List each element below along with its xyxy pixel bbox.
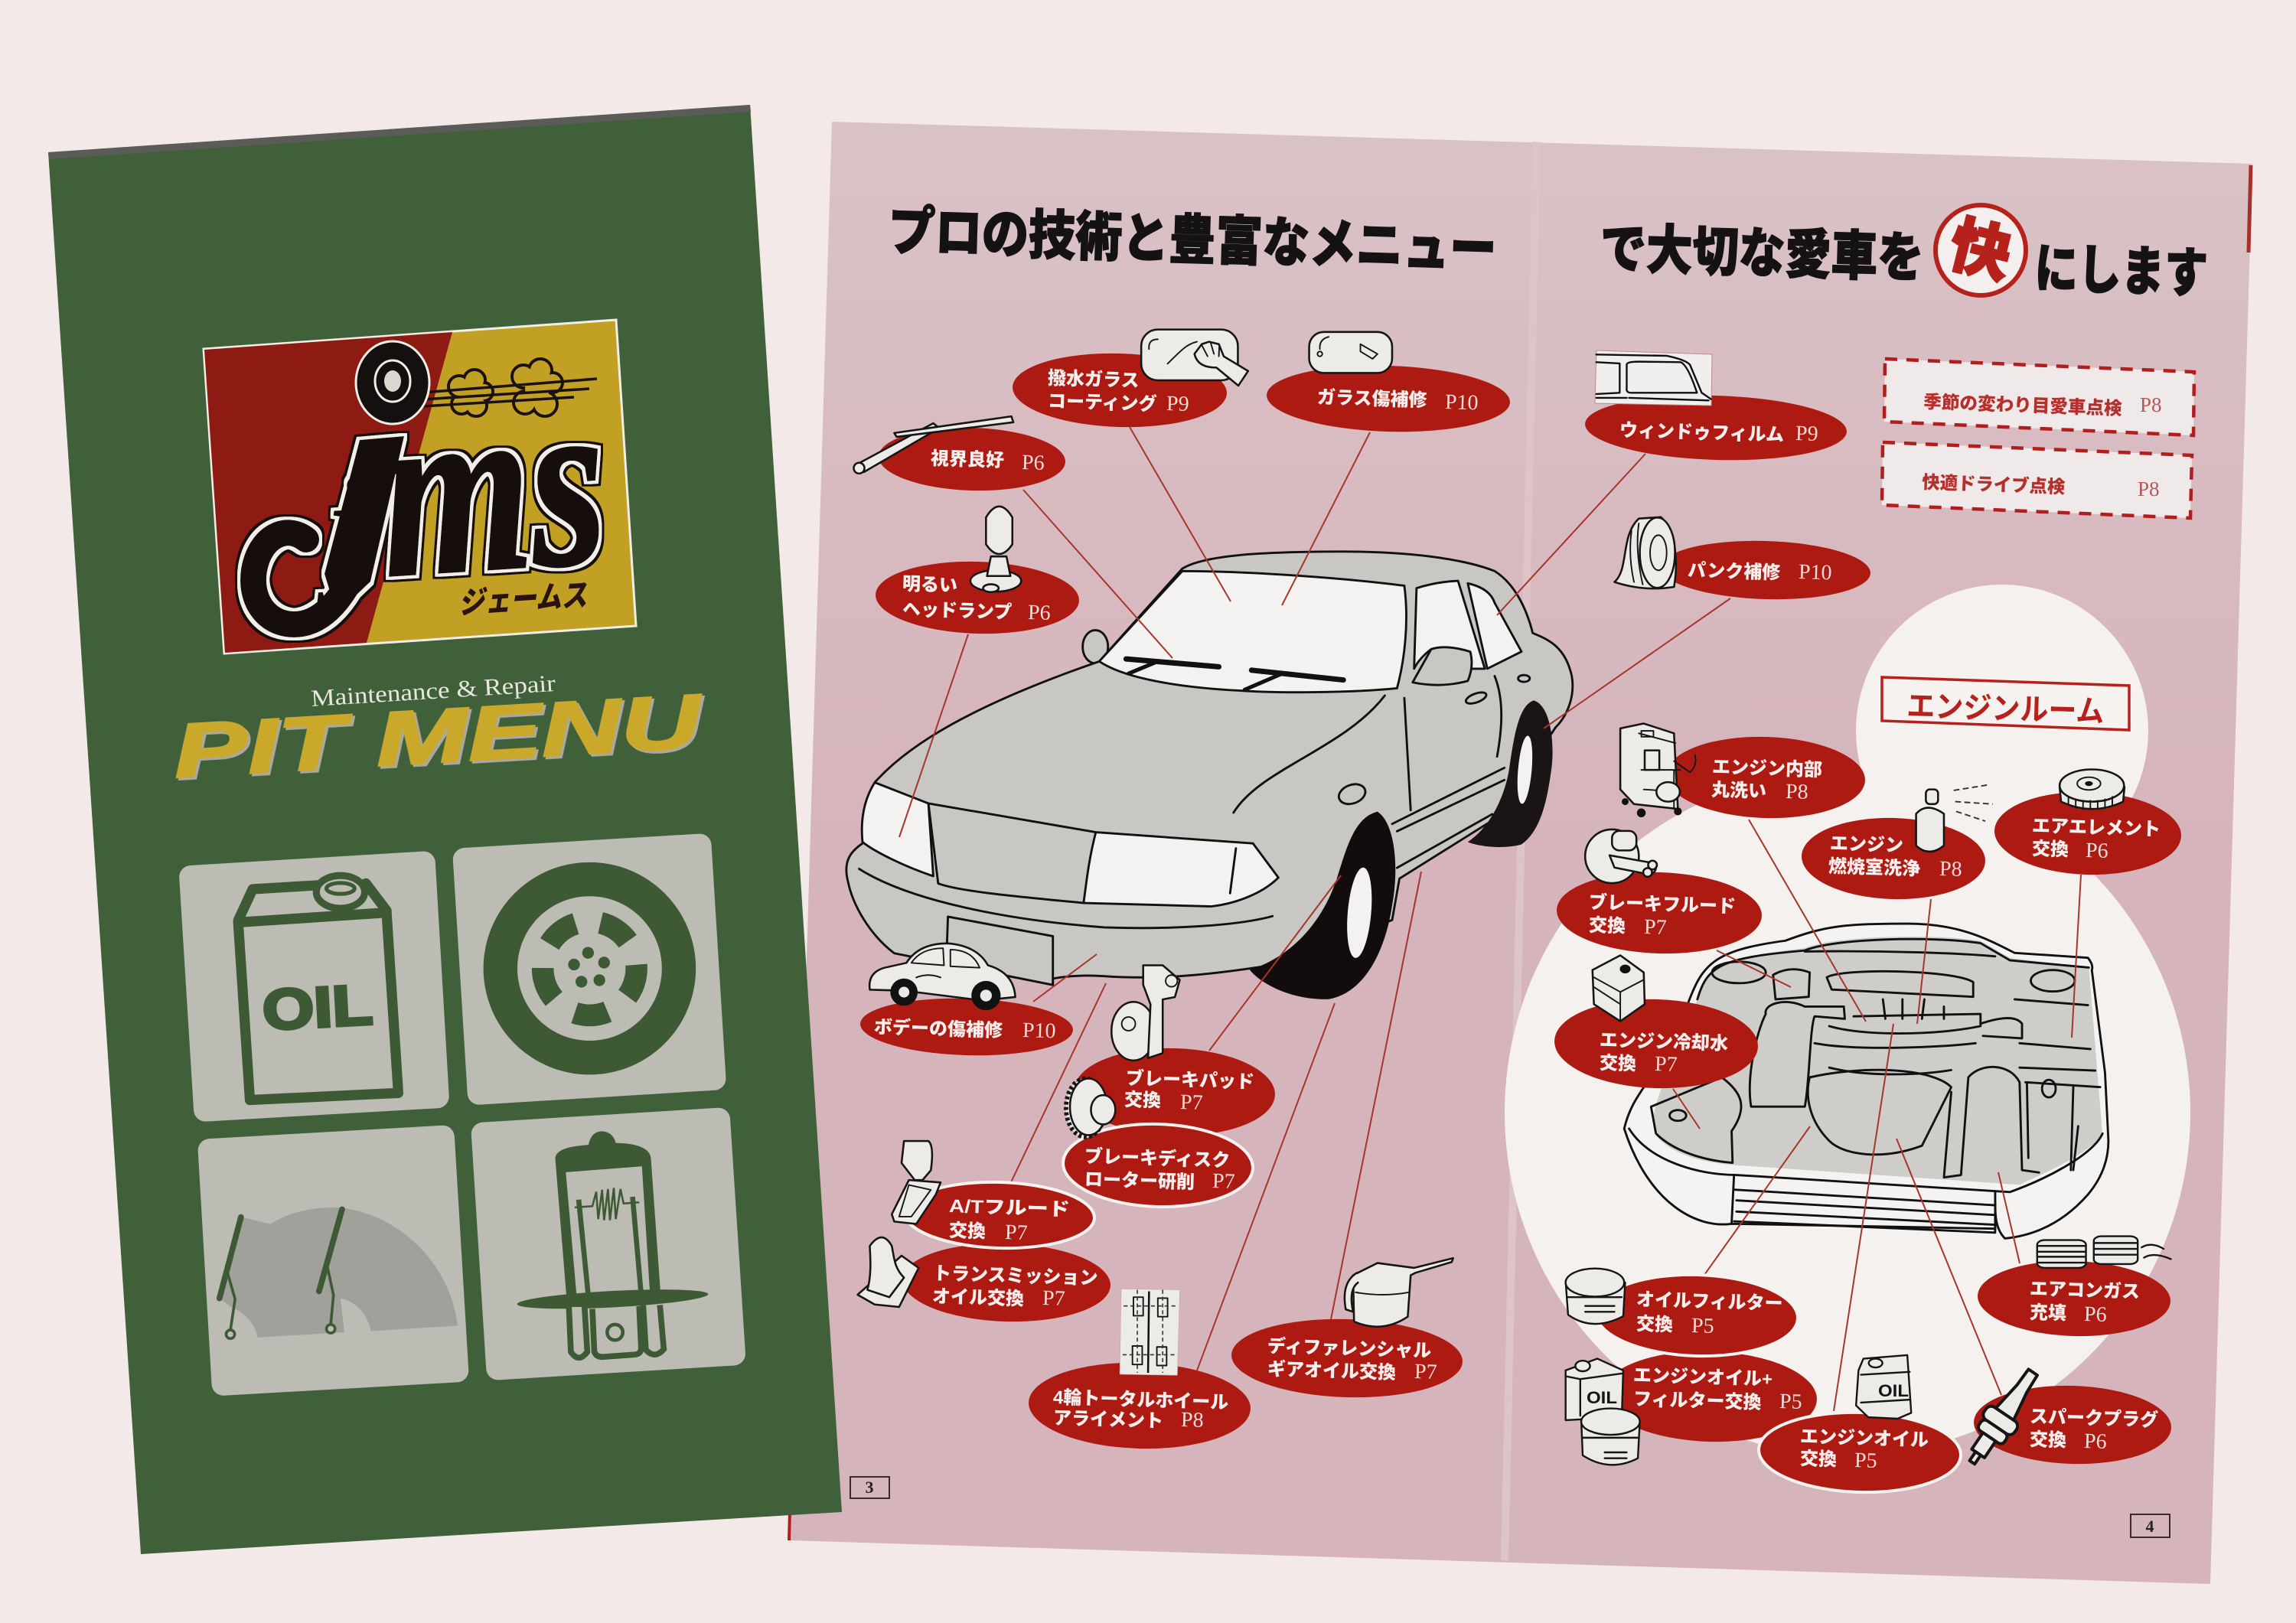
icon: brake assembly [1111, 965, 1180, 1061]
callout: engine oil: エンジンオイル [1800, 1426, 1929, 1451]
callout: wheel alignment [1027, 1360, 1252, 1452]
tile: tire [465, 846, 714, 1093]
callout: engine oil plus filter [1601, 1348, 1818, 1445]
icon: spray bottle [1916, 784, 1993, 852]
callout: wheel alignment: 4輪トータルホイール [1053, 1387, 1229, 1413]
icon: spark plug [1957, 1362, 2048, 1472]
callout: combustion chamber cleaning: 燃焼室洗浄 [1828, 856, 1920, 880]
callout: transmission oil: オイル交換 [932, 1286, 1024, 1310]
callout: window film: P9 [1795, 422, 1818, 446]
callout: seasonal check: P8 [2140, 393, 2162, 416]
callout: AT fluid: A/Tフルード [949, 1196, 1070, 1221]
logo [204, 320, 636, 653]
headlights and grille [862, 783, 1278, 907]
callout: spark plug: P6 [2084, 1429, 2107, 1454]
callout: differential gear oil: ディファレンシャル [1267, 1335, 1432, 1361]
logo speed lines [422, 379, 597, 406]
icon: alignment chart [1120, 1289, 1180, 1375]
heading: left half: プロの技術と豊富なメニュー [888, 201, 1498, 279]
logo wordmark jms: ms [373, 344, 613, 629]
tile: wiper [210, 1137, 458, 1383]
callout: differential gear oil [1231, 1316, 1463, 1400]
callout: oil filter [1594, 1272, 1799, 1359]
callout: seasonal check [1884, 359, 2194, 435]
icon: brake fluid master cylinder [1585, 829, 1657, 883]
icon: gear oil jug [1345, 1258, 1453, 1327]
engine room label [1882, 677, 2129, 730]
icon: coolant can [1593, 956, 1645, 1022]
callout: engine coolant [1553, 996, 1760, 1091]
callout: engine coolant: 交換 [1600, 1053, 1636, 1074]
callout: glass repair: P10 [1445, 390, 1479, 415]
callout: engine coolant: P7 [1655, 1052, 1678, 1077]
callout: puncture repair: パンク補修 [1688, 560, 1781, 584]
callout: spark plug: スパークプラグ [2030, 1406, 2158, 1431]
callout: window film [1584, 392, 1848, 464]
panel: brochure cover [48, 105, 842, 1554]
page number 3: 3 [865, 1478, 874, 1497]
icon: bulb [970, 507, 1021, 592]
callout: engine internal flush: エンジン内部 [1712, 757, 1822, 781]
page number 3 [850, 1477, 889, 1498]
logo wordmark jms [253, 344, 613, 629]
heading: right half [1600, 205, 2209, 304]
title: PIT MENU: PIT MENU [171, 678, 706, 794]
callout: puncture repair [1660, 538, 1871, 602]
callout: air element [1993, 789, 2183, 878]
windshield [1099, 571, 1406, 693]
icon: oil can [1856, 1355, 1911, 1419]
callout: engine coolant: エンジン冷却水 [1600, 1030, 1728, 1054]
callout: brake fluid: P7 [1644, 915, 1667, 940]
icons on upper left page [853, 330, 1392, 592]
callout: air con gas: エアコンガス [2030, 1279, 2140, 1302]
icon: glass chip [1309, 332, 1392, 373]
callout: brake fluid: 交換 [1589, 915, 1626, 937]
page number 4: 4 [2146, 1517, 2154, 1536]
callout: air element: 交換 [2032, 839, 2069, 860]
callout: spark plug: 交換 [2030, 1429, 2066, 1451]
panel: brochure inside spread [789, 122, 2252, 1584]
callout: oil filter: 交換 [1636, 1314, 1673, 1335]
text: oil can label small: OIL [1878, 1381, 1909, 1400]
callout: brake fluid: ブレーキフルード [1589, 891, 1736, 917]
callout: oil filter: P5 [1691, 1314, 1714, 1338]
callout: air con gas [1977, 1258, 2171, 1339]
callout: engine oil: 交換 [1800, 1449, 1837, 1470]
icon: wiper [853, 416, 1013, 474]
callout: body scratch repair: ボデーの傷補修 [874, 1016, 1003, 1041]
tile: bulb [483, 1119, 734, 1368]
callout: water repellent glass coating [1012, 350, 1228, 430]
callout: comfort drive check [1882, 442, 2192, 518]
icon: brake disc [1066, 1078, 1115, 1137]
callout: engine oil [1758, 1410, 1962, 1495]
callout: brake pads [1073, 1045, 1277, 1139]
icon: air con vents [2037, 1237, 2171, 1268]
callout: transmission oil [902, 1240, 1111, 1325]
callout: brake disc [1062, 1121, 1254, 1210]
callout: engine oil: P5 [1854, 1449, 1877, 1473]
callout: AT fluid: P7 [1005, 1221, 1028, 1245]
callout: differential gear oil: P7 [1414, 1360, 1437, 1384]
callout: water repellent glass coating: コーティング [1048, 390, 1157, 415]
tile: oil can [191, 863, 437, 1110]
icon: flushing machine [1620, 724, 1695, 817]
callout: air element: エアエレメント [2032, 816, 2161, 840]
callout: differential gear oil: ギアオイル交換 [1267, 1359, 1396, 1383]
heading: right half: で大切な愛車を [1600, 219, 1925, 288]
car illustration [846, 552, 1573, 999]
heading: right half: 快 [1942, 210, 2018, 291]
callout: air con gas: 充填 [2030, 1302, 2066, 1324]
callout: engine oil plus filter: P5 [1779, 1390, 1802, 1414]
callout: combustion chamber cleaning: エンジン [1830, 833, 1903, 856]
wheels [1250, 812, 1395, 999]
callout: spark plug [1973, 1383, 2172, 1467]
callout: seasonal check: 季節の変わり目愛車点検 [1923, 391, 2123, 419]
icon: mirror with hand [1141, 330, 1248, 386]
callout: wheel alignment: P8 [1181, 1408, 1204, 1432]
logo smoke clouds [448, 359, 563, 416]
tile: oil can: OIL [261, 973, 374, 1042]
callout: visibility: P6 [1022, 451, 1045, 475]
side windows [1413, 581, 1521, 685]
callout: engine oil plus filter: フィルター交換 [1633, 1389, 1762, 1413]
engine room label: エンジンルーム [1906, 689, 2105, 729]
page number 4 [2131, 1514, 2170, 1537]
icon: oil can and filter set [1566, 1359, 1640, 1465]
callout: puncture repair: P10 [1799, 560, 1832, 585]
icons on lower right page [1566, 1237, 2171, 1465]
text: maintenance and repair: Maintenance & Repair [310, 670, 557, 712]
callout: engine internal flush: P8 [1786, 780, 1808, 804]
engine room white background [1505, 585, 2190, 1455]
callout: AT fluid: 交換 [949, 1221, 986, 1242]
callout: visibility [878, 425, 1066, 494]
callout: bright headlamp [875, 559, 1080, 637]
callout: glass repair: ガラス傷補修 [1317, 387, 1427, 411]
callout: oil filter: オイルフィルター [1636, 1289, 1783, 1315]
callout: brake fluid [1555, 869, 1763, 957]
logo wheel [356, 341, 429, 424]
callout: bright headlamp: 明るい [902, 574, 957, 596]
callout: body scratch repair: P10 [1022, 1018, 1056, 1043]
callout: brake pads: ブレーキパッド [1126, 1067, 1254, 1093]
callout: engine internal flush [1665, 734, 1867, 821]
body lines [859, 675, 1530, 985]
callout: air element: P6 [2086, 839, 2108, 863]
wipers [1126, 659, 1343, 689]
callout: glass repair [1266, 362, 1511, 435]
leader lines [899, 427, 2081, 1411]
callout: combustion chamber cleaning: P8 [1939, 857, 1962, 882]
icon: AT shifter [892, 1141, 941, 1224]
icon: manual shifter [858, 1237, 918, 1307]
engine room illustration [1624, 924, 2108, 1238]
callout: air con gas: P6 [2084, 1302, 2107, 1327]
logo wordmark jms: j [306, 447, 377, 611]
callout: brake disc: ローター研削 [1084, 1169, 1195, 1193]
icon: taxi [869, 943, 1016, 1010]
callout: brake pads: P7 [1180, 1090, 1203, 1115]
callout: transmission oil: トランスミッション [933, 1263, 1098, 1289]
icon tiles [191, 846, 734, 1383]
callout: AT fluid [904, 1179, 1095, 1251]
callout: transmission oil: P7 [1042, 1286, 1065, 1311]
callout: brake disc: P7 [1212, 1169, 1235, 1194]
callout: engine internal flush: 丸洗い [1711, 780, 1766, 802]
callout: brake disc: ブレーキディスク [1084, 1146, 1231, 1172]
callout: water repellent glass coating: 撥水ガラス [1048, 368, 1140, 392]
callout: visibility: 視界良好 [931, 448, 1004, 471]
callout: water repellent glass coating: P9 [1166, 392, 1189, 416]
callout: bright headlamp: P6 [1028, 601, 1051, 625]
icon: oil filter [1566, 1269, 1625, 1324]
icons on lower left page [858, 943, 1453, 1375]
icon: tire [1614, 517, 1676, 588]
callout: engine oil plus filter: エンジンオイル+ [1633, 1365, 1773, 1390]
callout: bright headlamp: ヘッドランプ [902, 599, 1013, 623]
icon: air element [2060, 770, 2125, 810]
callout: comfort drive check: 快適ドライブ点検 [1922, 471, 2066, 497]
callout: wheel alignment: アライメント [1053, 1408, 1163, 1432]
car body [846, 552, 1573, 985]
text: oil set label small: OIL [1587, 1388, 1617, 1407]
callout: brake pads: 交換 [1124, 1090, 1161, 1111]
callout: combustion chamber cleaning [1800, 815, 1987, 902]
callout: window film: ウィンドゥフィルム [1619, 420, 1784, 445]
logo katakana: ジェームス [458, 577, 592, 621]
icon: window film [1595, 350, 1712, 406]
icons around engine room [1585, 517, 2125, 1022]
callout: comfort drive check: P8 [2138, 477, 2160, 500]
mirror left [1083, 631, 1108, 663]
callout: body scratch repair [859, 996, 1074, 1058]
heading: right half: にします [2034, 239, 2209, 304]
